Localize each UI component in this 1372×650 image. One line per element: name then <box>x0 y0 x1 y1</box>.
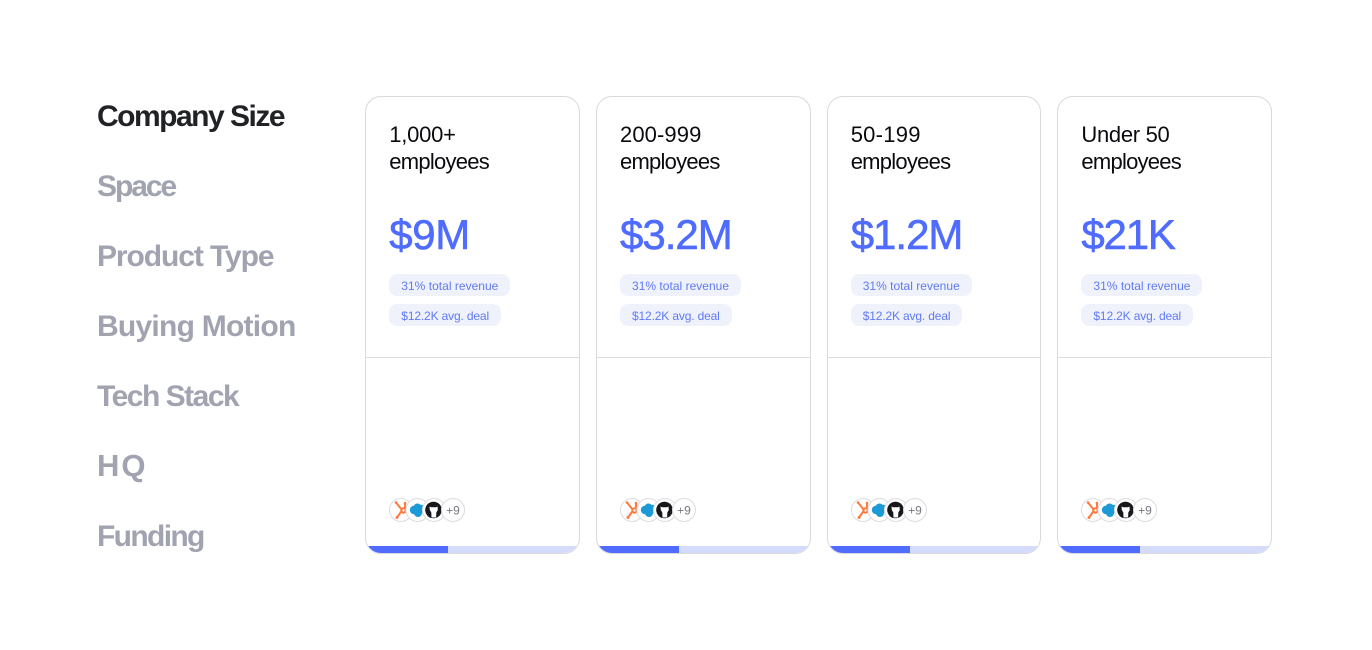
nav item: HQ: HQ <box>97 448 148 483</box>
heading <box>389 122 489 174</box>
tag: average deal: $12.2K avg. deal <box>632 309 720 323</box>
tag: average deal: $12.2K avg. deal <box>401 309 489 323</box>
share progress bar <box>1058 546 1271 553</box>
heading: 1,000+ <box>389 122 456 147</box>
heading: 200-999 <box>620 122 701 147</box>
icons: tech logos <box>620 498 696 522</box>
revenue value: $21K <box>1081 211 1175 258</box>
nav item: Company Size: Company Size <box>97 100 284 133</box>
tag: average deal <box>851 304 962 326</box>
share progress bar <box>828 546 1040 553</box>
panel: Under 50 employees <box>1057 96 1272 554</box>
heading <box>1081 122 1181 174</box>
revenue value: $1.2M <box>851 211 962 258</box>
icons: tech logos <box>851 498 927 522</box>
tag: total revenue <box>620 274 741 296</box>
tag: total revenue: 31% total revenue <box>632 279 729 293</box>
nav item: Funding: Funding <box>97 520 204 553</box>
tag: total revenue <box>851 274 972 296</box>
navigation list <box>97 100 296 553</box>
revenue value: $9M <box>389 211 470 258</box>
icons: tech logos: +9 <box>1139 504 1153 518</box>
tag: average deal: $12.2K avg. deal <box>1093 309 1181 323</box>
tag: average deal <box>389 304 501 326</box>
tag: total revenue: 31% total revenue <box>401 279 498 293</box>
tag: average deal <box>620 304 732 326</box>
panel: 50-199 employees <box>827 96 1041 554</box>
icons: tech logos: +9 <box>677 504 691 518</box>
icons: tech logos <box>389 498 465 522</box>
icons: tech logos: +9 <box>908 504 922 518</box>
panel: 200-999 employees <box>596 96 810 554</box>
nav item: Product Type: Product Type <box>97 240 274 273</box>
revenue value: $3.2M <box>620 211 732 258</box>
tag: total revenue: 31% total revenue <box>863 279 960 293</box>
heading: employees <box>389 149 489 174</box>
nav item: Buying Motion: Buying Motion <box>97 310 296 343</box>
panel: 1,000+ employees <box>365 96 580 554</box>
icons: tech logos <box>1081 498 1157 522</box>
heading: Under 50 <box>1081 122 1170 147</box>
icons: tech logos: +9 <box>446 504 460 518</box>
heading: employees <box>1081 149 1181 174</box>
share progress bar <box>597 546 810 553</box>
tag: total revenue: 31% total revenue <box>1093 279 1190 293</box>
heading: employees <box>851 149 950 174</box>
tag: average deal: $12.2K avg. deal <box>863 309 950 323</box>
tag: total revenue <box>1081 274 1202 296</box>
heading <box>851 122 950 174</box>
nav item: Space: Space <box>97 170 175 203</box>
heading <box>620 122 720 174</box>
tag: total revenue <box>389 274 510 296</box>
share progress bar <box>366 546 579 553</box>
heading: employees <box>620 149 720 174</box>
heading: 50-199 <box>851 122 921 147</box>
nav item: Tech Stack: Tech Stack <box>97 380 238 413</box>
tag: average deal <box>1081 304 1193 326</box>
